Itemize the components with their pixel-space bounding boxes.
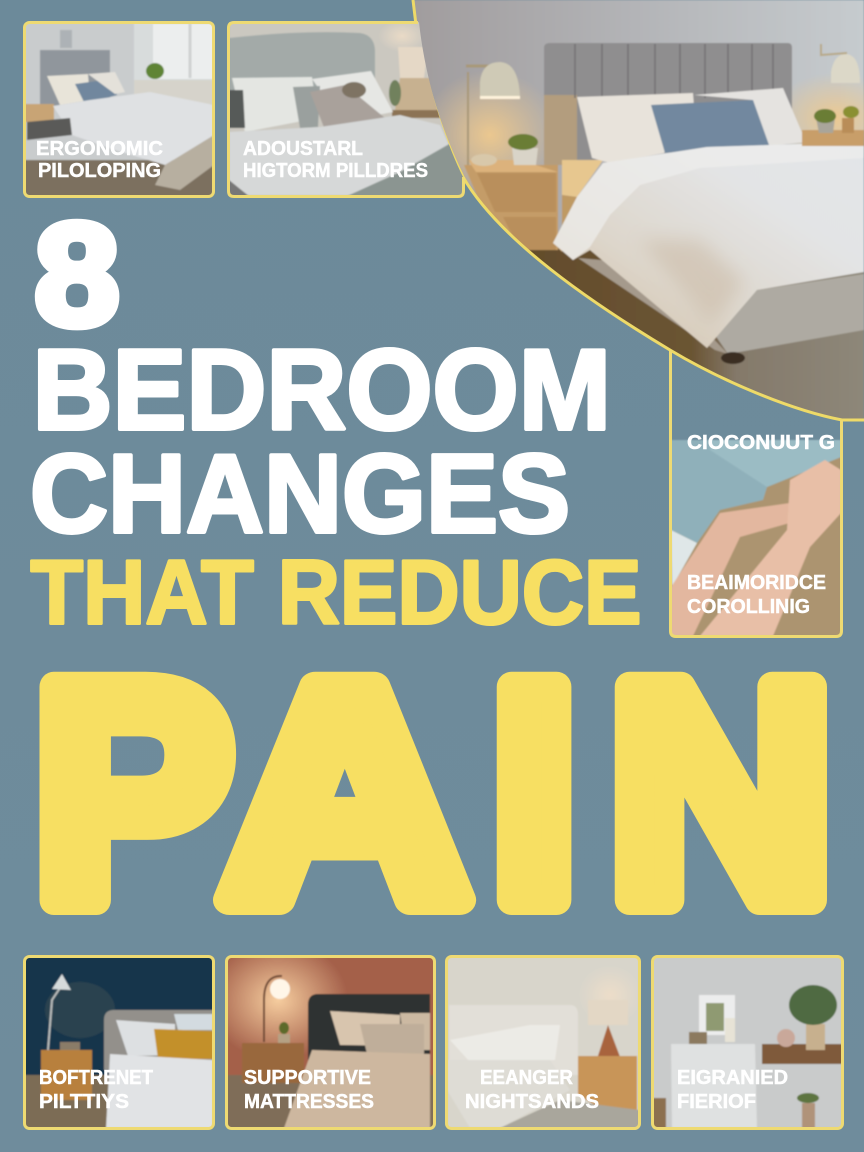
title: 8 bedroom changes: 8 <box>35 193 119 356</box>
label <box>687 432 835 618</box>
headline: pain <box>34 619 833 966</box>
label: BOFTRENET <box>39 1067 153 1089</box>
label: MATTRESSES <box>244 1091 374 1113</box>
label: COROLLINIG <box>687 596 810 618</box>
label: CIOCONUUT G <box>687 432 835 454</box>
panel: ergonomic pillows photo <box>24 22 214 197</box>
label <box>39 1067 153 1113</box>
panel: side photo with hands <box>670 350 842 636</box>
panel: adjustable pillows photo <box>228 20 469 197</box>
curve border <box>413 0 864 420</box>
label: PILOLOPING <box>38 160 161 182</box>
title: 8 bedroom changes <box>30 193 611 556</box>
label: PILTTIYS <box>39 1091 129 1113</box>
label: ERGONOMIC <box>36 138 163 160</box>
panel: cream bedroom <box>446 956 642 1128</box>
label: ADOUSTARL <box>243 138 363 160</box>
label <box>243 138 428 182</box>
label: NIGHTSANDS <box>465 1091 599 1113</box>
label <box>36 138 163 182</box>
title: 8 bedroom changes: BEDROOM <box>32 327 611 454</box>
label <box>465 1067 599 1113</box>
headline: pain: N <box>609 619 833 966</box>
panel: dark blue bedroom <box>24 956 214 1128</box>
label <box>244 1067 374 1113</box>
subtitle: that reduce: THAT REDUCE <box>30 542 642 644</box>
label: SUPPORTIVE <box>244 1067 371 1089</box>
headline: pain: P <box>34 620 232 966</box>
title: 8 bedroom changes: CHANGES <box>30 432 570 556</box>
headline: pain: A <box>221 620 469 966</box>
label: HIGTORM PILLDRES <box>243 160 428 182</box>
label: FIERIOF <box>677 1091 756 1113</box>
panel: warm bedroom <box>225 955 436 1130</box>
label: BEAIMORIDCE <box>687 572 826 594</box>
photo: main bedroom <box>410 0 864 425</box>
panel: white nightstand <box>652 956 842 1128</box>
label: EEANGER <box>480 1067 574 1089</box>
label: EIGRANIED <box>677 1067 788 1089</box>
headline: pain: I <box>491 619 577 966</box>
label <box>677 1067 788 1113</box>
